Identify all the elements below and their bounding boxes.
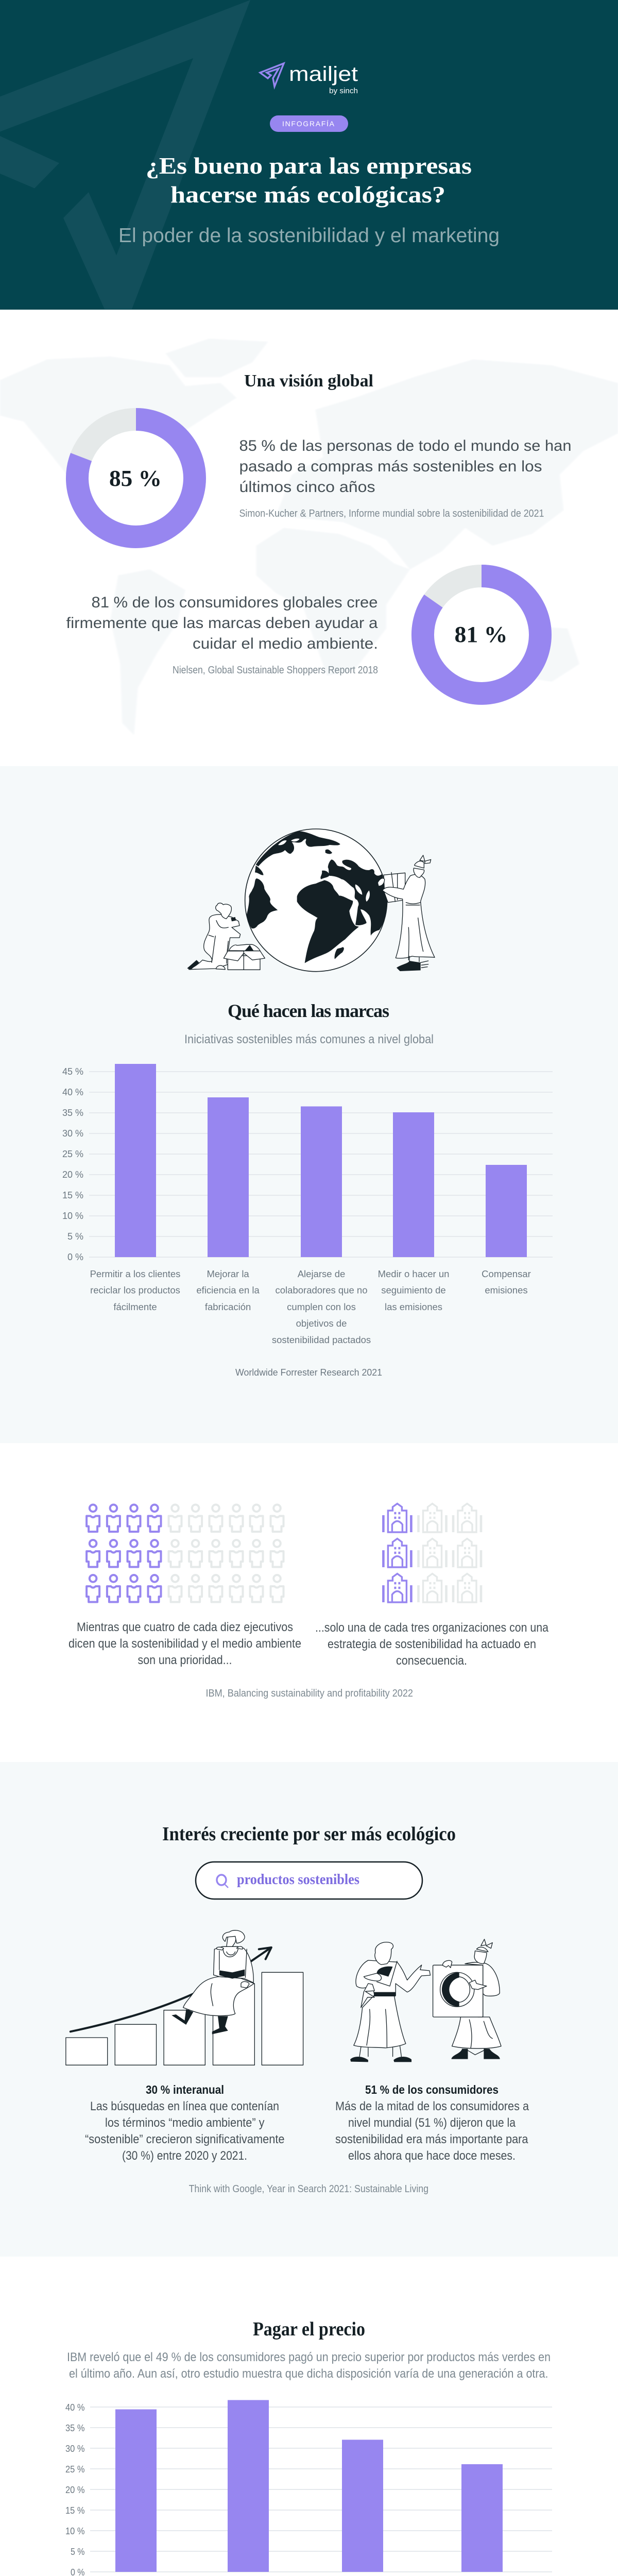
text block: 30 % interanual: “sostenible” crecieron significativamente [85, 2132, 284, 2146]
bar chart: generaciones: 15 % [65, 2505, 84, 2516]
donut chart: 85 % [77, 419, 195, 537]
heading: Interés creciente por ser más ecológico [162, 1823, 456, 1845]
badge: infografía: INFOGRAFÍA [282, 120, 335, 128]
intro text [67, 2350, 551, 2381]
bar chart: generaciones: 40 % [65, 2402, 84, 2413]
logo: mailjet by sinch: by sinch [329, 87, 358, 95]
text block: 81 % [66, 594, 378, 676]
text block: 30 % interanual [85, 2083, 284, 2163]
text block: 81 %: cuidar el medio ambiente. [193, 635, 378, 652]
bar chart: generaciones: 30 % [65, 2444, 84, 2454]
title: ¿Es bueno para las empresas [146, 152, 472, 179]
panel: qué hacen las marcas [0, 766, 618, 1443]
text block: 51 % de los consumidores: ellos ahora que hace doce meses. [348, 2149, 516, 2163]
text block: 51 % de los consumidores: 51 % de los consumidores [365, 2083, 499, 2096]
bar chart: iniciativas: 25 % [62, 1149, 83, 1159]
bar chart: iniciativas: Compensar [482, 1268, 531, 1279]
logo: mailjet by sinch [260, 63, 358, 95]
text block: ejecutivos [68, 1620, 301, 1667]
subtitle: Iniciativas sostenibles más comunes a nivel global [184, 1032, 434, 1046]
text block: organizaciones: consecuencia. [396, 1654, 467, 1668]
bar chart: iniciativas: 40 % [62, 1087, 83, 1097]
decorative paper plane background [0, 0, 250, 309]
bar chart: iniciativas: Medir o hacer un [378, 1268, 449, 1279]
search box: productos sostenibles [237, 1872, 359, 1888]
panel: una visión global [0, 310, 618, 766]
title [146, 152, 472, 208]
bar chart: iniciativas: 30 % [62, 1128, 83, 1139]
bar chart: generaciones: 10 % [65, 2526, 84, 2536]
intro text: IBM reveló que el 49 % de los consumidores pagó un precio superior por productos más verdes en [67, 2350, 551, 2364]
text block: 81 %: Nielsen, Global Sustainable Shoppers Report 2018 [173, 665, 378, 676]
bar chart: iniciativas: 45 % [62, 1066, 83, 1077]
bar chart: iniciativas: 20 % [62, 1170, 83, 1180]
bar chart: iniciativas: 10 % [62, 1211, 83, 1221]
source: Think with Google, Year in Search 2021: Sustainable Living [189, 2183, 428, 2195]
bar chart: generaciones: 35 % [65, 2423, 84, 2433]
badge: infografía [270, 115, 348, 132]
bar chart: iniciativas: objetivos de [296, 1318, 347, 1329]
text block: 30 % interanual: Las búsquedas en línea que contenían [90, 2099, 279, 2113]
bar chart: iniciativas: fabricación [205, 1301, 251, 1312]
text block: 81 %: firmemente que las marcas deben ayudar a [66, 615, 378, 632]
heading: Pagar el precio [253, 2318, 365, 2340]
bar chart: iniciativas: 5 % [67, 1231, 83, 1242]
bar chart: iniciativas: 15 % [62, 1190, 83, 1200]
donut chart: 81 %: 81 % [454, 622, 508, 647]
text block: 85 %: últimos cinco años [239, 479, 375, 496]
intro text: el último año. Aun así, otro estudio muestra que dicha disposición varía de una generación a otra. [69, 2367, 548, 2381]
text block: 85 %: Simon-Kucher & Partners, Informe mundial sobre la sostenibilidad de 2021 [239, 508, 544, 519]
bar chart: iniciativas: emisiones [485, 1285, 528, 1295]
title: hacerse más ecológicas? [170, 181, 445, 208]
text block: 51 % de los consumidores: Más de la mitad de los consumidores a [335, 2099, 529, 2113]
bar chart: generaciones: 5 % [71, 2547, 84, 2557]
text block: 51 % de los consumidores [335, 2083, 529, 2163]
bar chart: iniciativas: fácilmente [113, 1301, 157, 1312]
bar chart: iniciativas: reciclar los productos [90, 1285, 180, 1295]
text block: organizaciones [315, 1621, 549, 1668]
illustration: globe with figures [187, 829, 435, 972]
icon: magnifier [217, 1875, 228, 1888]
text block: 85 % [239, 437, 572, 519]
bar chart: iniciativas: eficiencia en la [196, 1285, 260, 1295]
bar chart: iniciativas [62, 1064, 553, 1345]
text block: organizaciones: ...solo una de cada tres organizaciones con una [315, 1621, 549, 1635]
bar chart: iniciativas: seguimiento de [381, 1285, 446, 1295]
text block: ejecutivos: son una prioridad... [138, 1653, 232, 1667]
bar chart: iniciativas: 0 % [67, 1252, 83, 1262]
panel: interés creciente [0, 1762, 618, 2257]
bar chart: generaciones: 25 % [65, 2464, 84, 2475]
text block: 51 % de los consumidores: nivel mundial (51 %) dijeron que la [348, 2116, 516, 2130]
text block: 81 %: 81 % de los consumidores globales cree [92, 594, 378, 611]
bar chart: iniciativas: cumplen con los [287, 1301, 356, 1312]
bar chart: iniciativas: 35 % [62, 1108, 83, 1118]
bar chart: iniciativas: Mejorar la [207, 1268, 249, 1279]
bar chart: generaciones [65, 2400, 552, 2576]
bar chart: iniciativas: las emisiones [385, 1301, 442, 1312]
panel: header [0, 0, 618, 310]
bar chart: iniciativas: Permitir a los clientes [90, 1268, 180, 1279]
heading: Una visión global [244, 371, 373, 391]
subtitle: El poder de la sostenibilidad y el marketing [118, 225, 500, 247]
text block: 30 % interanual: 30 % interanual [146, 2083, 224, 2096]
illustration: growth bars with figure [66, 1930, 501, 2065]
text block: ejecutivos: dicen que la sostenibilidad y el medio ambiente [68, 1637, 301, 1651]
logo: mailjet by sinch: mailjet [289, 63, 358, 86]
icons: buildings, 1 of 3 [383, 1503, 481, 1602]
bar chart: iniciativas: Alejarse de [298, 1268, 345, 1279]
source: IBM, Balancing sustainability and profitability 2022 [206, 1688, 413, 1699]
text block: organizaciones: estrategia de sostenibilidad ha actuado en [328, 1637, 536, 1651]
donut chart: 81 % [423, 576, 540, 693]
text block: 85 %: pasado a compras más sostenibles en los [239, 458, 542, 475]
text block: 30 % interanual: los términos “medio ambiente” y [105, 2116, 265, 2130]
text block: 85 %: 85 % de las personas de todo el mundo se han [239, 437, 572, 454]
bar chart: generaciones: 20 % [65, 2485, 84, 2495]
donut chart: 85 %: 85 % [109, 466, 162, 491]
text block: ejecutivos: Mientras que cuatro de cada diez ejecutivos [77, 1620, 293, 1634]
panel: pagar el precio [0, 2257, 618, 2576]
heading: Qué hacen las marcas [228, 1001, 389, 1021]
panel: prioridad frente a acción [0, 1443, 618, 1762]
icons: people, 4 of 10 [87, 1504, 283, 1602]
text block: 30 % interanual: (30 %) entre 2020 y 2021. [122, 2149, 247, 2163]
bar chart: iniciativas: colaboradores que no [276, 1285, 367, 1295]
source: Worldwide Forrester Research 2021 [235, 1367, 382, 1378]
search box [196, 1862, 422, 1899]
bar chart: iniciativas: sostenibilidad pactados [272, 1334, 371, 1345]
text block: 51 % de los consumidores: sostenibilidad era más importante para [335, 2132, 528, 2146]
world map background [0, 338, 618, 735]
